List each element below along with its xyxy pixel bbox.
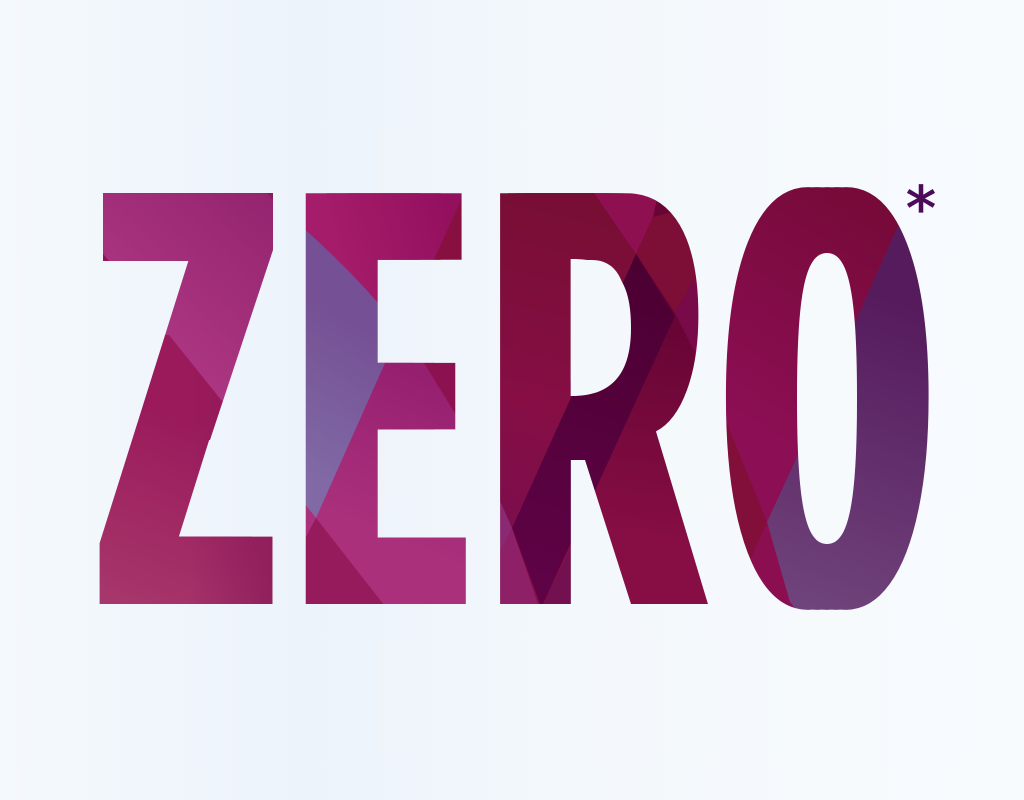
letter O	[726, 187, 929, 610]
O counter	[797, 253, 857, 544]
letter E	[306, 193, 466, 604]
title: ZERO	[90, 180, 940, 615]
R counter	[571, 259, 631, 396]
asterisk: *	[906, 174, 936, 244]
letter Z	[100, 193, 273, 604]
letter R	[500, 193, 708, 604]
